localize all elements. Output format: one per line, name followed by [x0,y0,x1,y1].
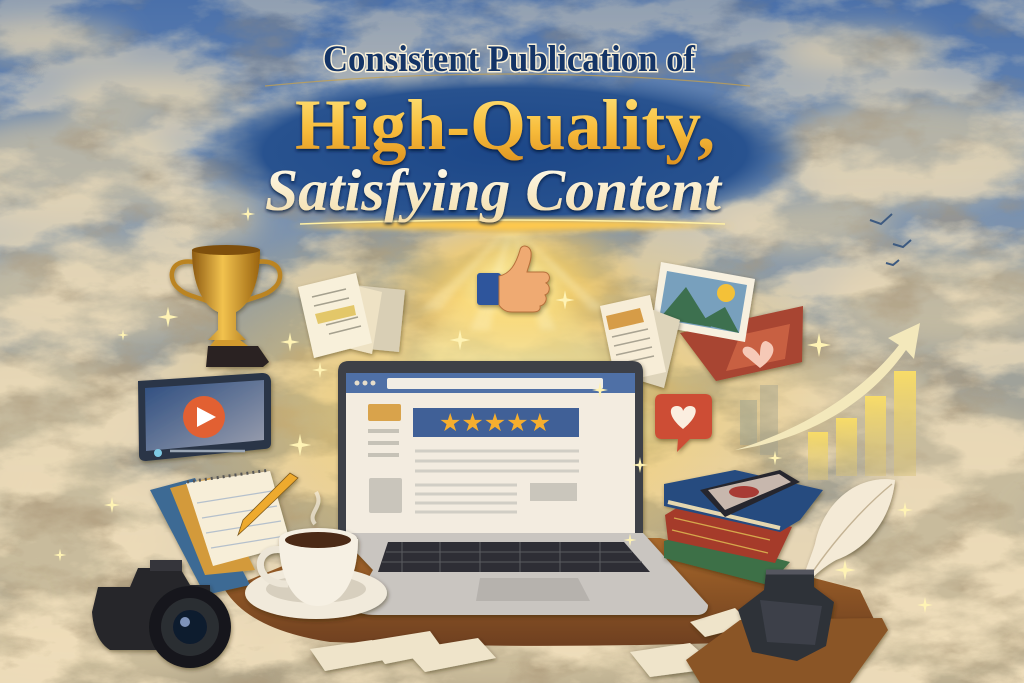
icon: photo card and red heart card [652,262,803,381]
icon: notepad and pencil [150,470,298,595]
laptop [338,361,708,615]
icon: heart chat bubble [655,394,712,452]
icon: video player [138,373,271,461]
icon: document left [298,273,405,358]
laptop: ★★★★★ [439,408,551,437]
sheets on desk [310,608,752,677]
icon: coffee cup [245,492,387,619]
sidebar [368,404,401,421]
icon: stack of books and phone [664,470,823,585]
center radiant glow [145,190,865,620]
rating banner [413,408,579,437]
title line 2: High-Quality, [295,85,715,165]
title line 1: Consistent Publication of [323,39,696,80]
browser bar [346,373,635,393]
icon: feather quill and inkwell [686,479,895,683]
growth chart [735,323,920,480]
title line 3: Satisfying Content [265,157,723,223]
content lines [415,451,579,471]
keyboard base [338,533,708,615]
desk [225,538,882,646]
icon: thumbs up [477,246,549,312]
arrow [735,323,920,450]
icon: birds [870,214,911,265]
icon: trophy [172,245,280,367]
icon: document right [600,295,680,388]
sparkles [54,207,933,613]
icon: camera [92,560,231,668]
title banner [195,39,815,234]
